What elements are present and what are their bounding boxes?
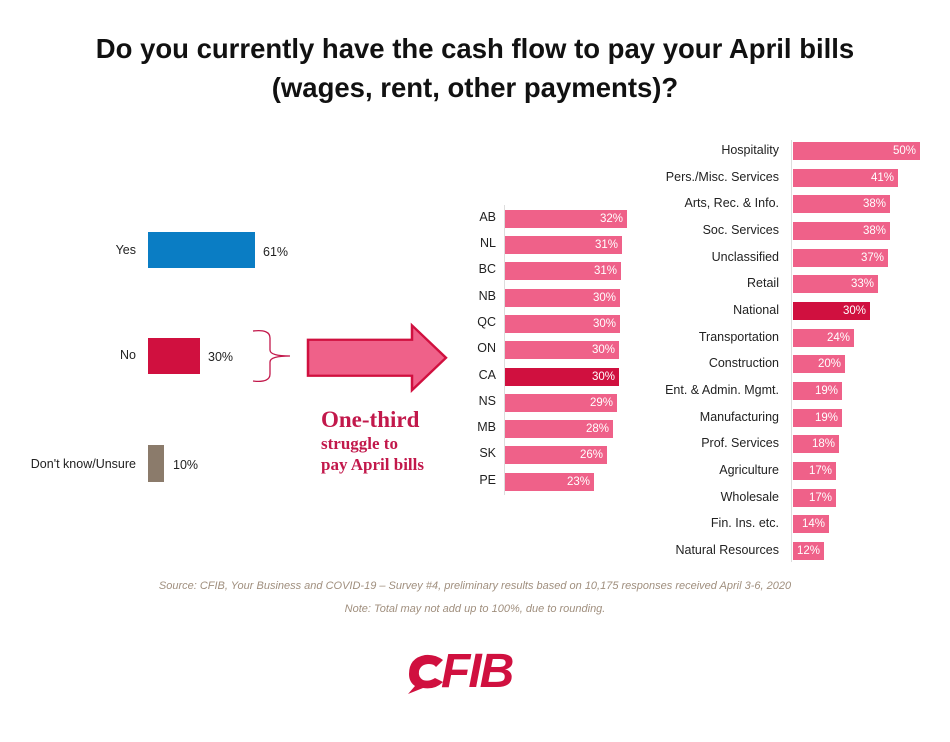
source note: [159, 580, 791, 615]
chart: sectors: 41%: [871, 172, 894, 184]
chart: provinces: [477, 205, 627, 495]
chart: provinces: MB: [477, 420, 496, 434]
title: (wages, rent, other payments)?: [272, 72, 678, 103]
source note: Source: CFIB, Your Business and COVID-19 – Survey #4, preliminary results based on 10,175 responses received April 3-6, 2020: [159, 580, 791, 592]
chart: provinces: 31%: [594, 265, 617, 277]
arrow: [306, 322, 448, 393]
callout text: [321, 407, 424, 474]
chart: sectors: Unclassified: [712, 250, 779, 264]
chart: provinces: 31%: [595, 239, 618, 251]
chart: sectors: Natural Resources: [675, 543, 779, 557]
chart: sectors: 12%: [797, 545, 820, 557]
chart: overall: 61%: [263, 245, 288, 259]
chart: provinces: PE: [479, 473, 496, 487]
chart: provinces: 30%: [592, 344, 615, 356]
brace: [252, 330, 290, 382]
callout text: One-third: [321, 407, 419, 432]
chart: sectors: Retail: [747, 276, 779, 290]
title: Do you currently have the cash flow to pay your April bills: [96, 33, 854, 64]
chart: sectors: National: [733, 303, 779, 317]
chart: provinces: 30%: [593, 318, 616, 330]
chart: provinces: 28%: [586, 423, 609, 435]
chart: sectors: Soc. Services: [703, 223, 779, 237]
chart: overall: Don't know/Unsure: [31, 457, 136, 471]
logo: [408, 645, 512, 698]
chart: sectors: Construction: [709, 356, 779, 370]
chart: provinces: 29%: [590, 397, 613, 409]
chart: overall: 10%: [173, 458, 198, 472]
chart: sectors: 38%: [863, 225, 886, 237]
chart: provinces: CA: [479, 368, 496, 382]
chart: provinces: AB: [479, 210, 496, 224]
chart: sectors: Transportation: [699, 330, 779, 344]
source note: Note: Total may not add up to 100%, due to rounding.: [345, 603, 605, 615]
chart: sectors: Ent. & Admin. Mgmt.: [665, 383, 779, 397]
callout text: pay April bills: [321, 455, 424, 474]
chart: sectors: 19%: [815, 385, 838, 397]
chart: sectors: [665, 140, 920, 562]
chart: overall: 30%: [208, 350, 233, 364]
chart: sectors: 50%: [893, 145, 916, 157]
chart: sectors: Fin. Ins. etc.: [711, 516, 779, 530]
chart: provinces: 32%: [600, 213, 623, 225]
chart: sectors: 33%: [851, 278, 874, 290]
chart: overall: [31, 232, 288, 482]
chart: sectors: 14%: [802, 518, 825, 530]
chart: provinces: NB: [479, 289, 496, 303]
chart: provinces: 23%: [567, 476, 590, 488]
chart: overall: No: [120, 348, 136, 362]
chart: provinces: BC: [479, 262, 496, 276]
chart: sectors: Arts, Rec. & Info.: [685, 196, 779, 210]
chart: provinces: 26%: [580, 449, 603, 461]
chart: sectors: Agriculture: [719, 463, 779, 477]
chart: overall: Yes: [116, 243, 136, 257]
callout text: struggle to: [321, 434, 398, 453]
chart: sectors: 38%: [863, 198, 886, 210]
chart: sectors: Pers./Misc. Services: [666, 170, 779, 184]
chart: provinces: ON: [477, 341, 496, 355]
chart: provinces: SK: [479, 446, 496, 460]
chart: sectors: 20%: [818, 358, 841, 370]
chart: sectors: 24%: [827, 332, 850, 344]
chart: provinces: QC: [477, 315, 496, 329]
title: [96, 33, 854, 103]
chart: provinces: NL: [480, 236, 496, 250]
chart: sectors: 19%: [815, 412, 838, 424]
chart: sectors: Hospitality: [721, 143, 779, 157]
chart: sectors: 37%: [861, 252, 884, 264]
logo: FIB: [441, 645, 512, 698]
chart: sectors: 18%: [812, 438, 835, 450]
chart: sectors: Wholesale: [721, 490, 779, 504]
chart: provinces: NS: [479, 394, 496, 408]
chart: provinces: 30%: [592, 371, 615, 383]
chart: sectors: Manufacturing: [700, 410, 779, 424]
chart: sectors: 30%: [843, 305, 866, 317]
chart: provinces: 30%: [593, 292, 616, 304]
chart: sectors: Prof. Services: [701, 436, 779, 450]
chart: sectors: 17%: [809, 492, 832, 504]
chart: sectors: 17%: [809, 465, 832, 477]
